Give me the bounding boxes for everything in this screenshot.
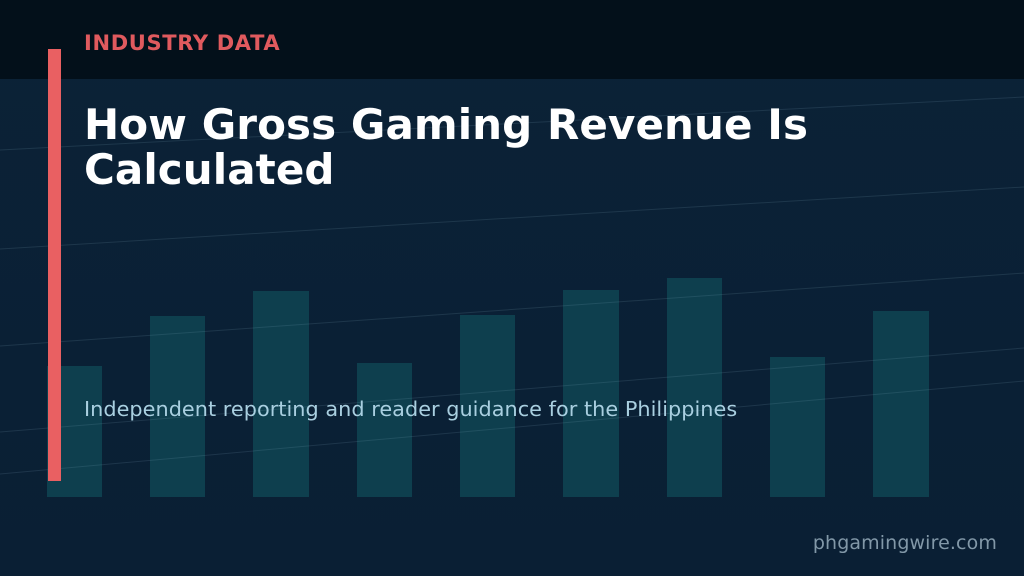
title bbox=[84, 100, 808, 194]
source domain: phgamingwire.com bbox=[813, 532, 997, 554]
title: How Gross Gaming Revenue Is bbox=[84, 100, 808, 149]
subtitle: Independent reporting and reader guidance for the Philippines bbox=[84, 397, 737, 421]
eyebrow label: INDUSTRY DATA bbox=[84, 31, 280, 55]
header band bbox=[0, 0, 1024, 79]
accent bar bbox=[48, 49, 61, 481]
title: Calculated bbox=[84, 145, 335, 194]
